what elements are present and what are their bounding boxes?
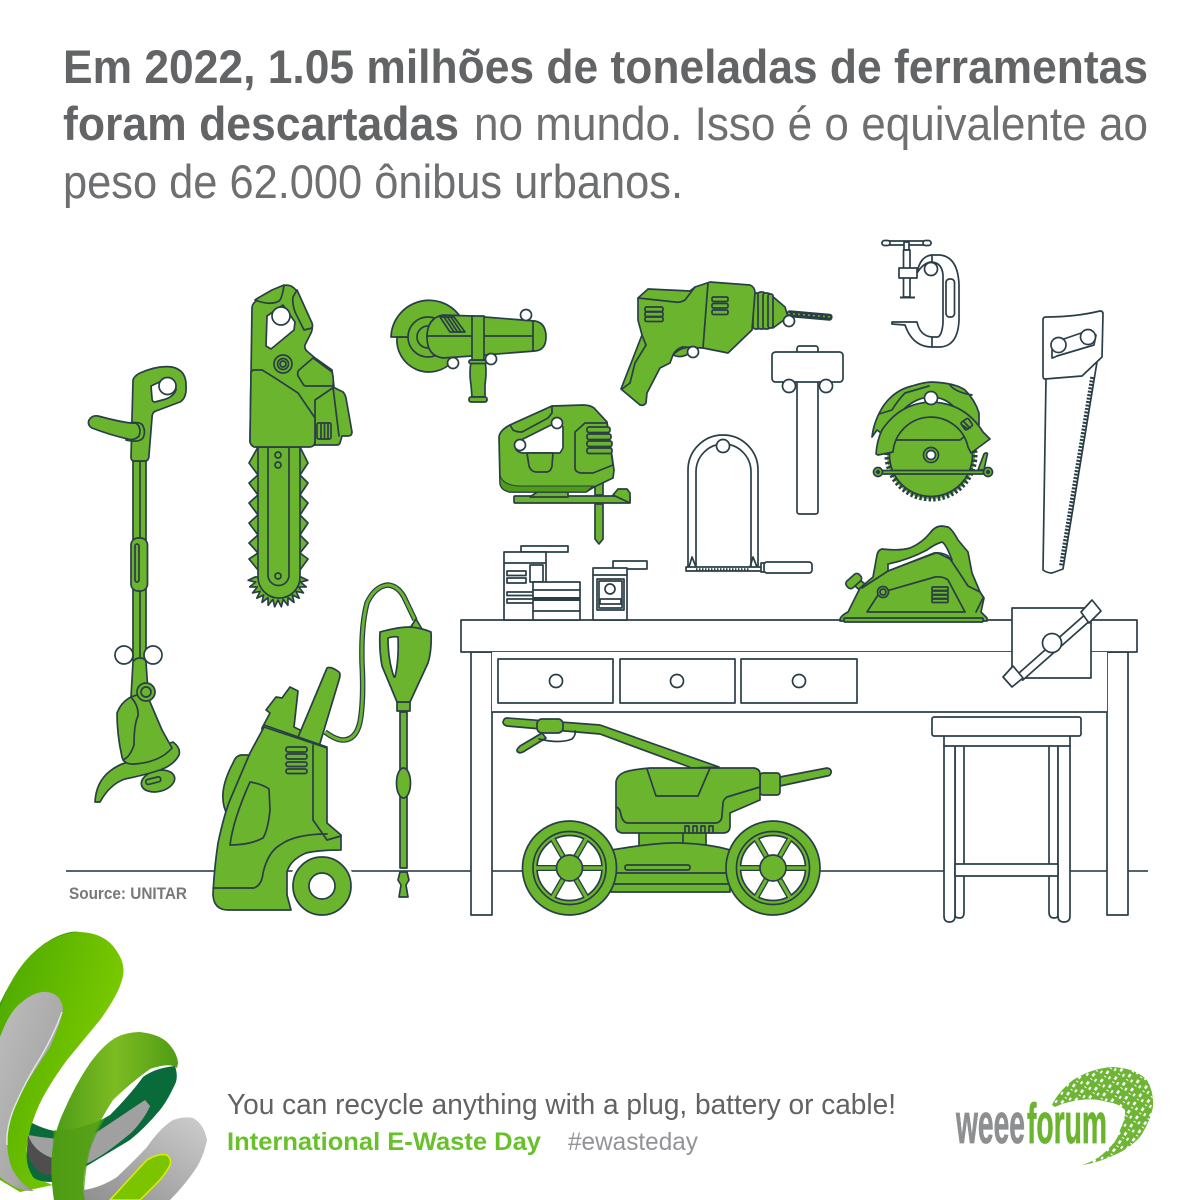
battery	[312, 387, 352, 445]
logo mark: green swirl	[0, 932, 207, 1200]
title: Em 2022, 1.05 milhões de toneladas de ferramentas	[63, 40, 1148, 93]
motor head	[117, 692, 172, 764]
weeeforum logo	[956, 1067, 1153, 1165]
white halo around wheel	[289, 853, 355, 919]
logo swirl	[1052, 1067, 1153, 1165]
device: stacked box	[533, 582, 580, 620]
motor housing	[616, 768, 760, 833]
electric drill	[621, 282, 833, 405]
lawn mower	[503, 718, 831, 915]
wheel	[293, 857, 351, 915]
shaft	[131, 461, 148, 661]
workbench	[461, 600, 1137, 915]
drawers	[498, 659, 857, 703]
hand saw	[1043, 311, 1103, 573]
left wheel	[522, 821, 616, 915]
hand planer	[840, 526, 987, 622]
title	[63, 40, 1148, 208]
vent	[317, 423, 331, 439]
vents	[645, 297, 728, 322]
vent	[440, 317, 465, 332]
angle grinder	[391, 300, 546, 402]
title: peso de 62.000 ônibus urbanos.	[63, 155, 683, 208]
hammer	[772, 346, 843, 514]
side handle	[470, 362, 486, 397]
chainsaw	[248, 285, 352, 607]
handle	[503, 718, 719, 768]
top fins	[262, 687, 306, 745]
blade teeth	[249, 447, 308, 570]
handle	[131, 367, 186, 461]
blade	[595, 498, 603, 544]
front knob	[844, 572, 870, 594]
jigsaw	[499, 405, 630, 544]
vent	[932, 587, 948, 602]
campaign name: International E-Waste Day	[227, 1128, 541, 1156]
grey loop	[0, 992, 63, 1191]
light grey lobe	[83, 1117, 207, 1200]
vents	[286, 747, 307, 774]
title: no mundo. Isso é o equivalente ao	[474, 97, 1148, 150]
bit	[786, 310, 833, 321]
spool	[139, 767, 177, 795]
toothed blade	[887, 411, 975, 499]
title: foram descartadas	[63, 97, 459, 150]
guard	[95, 742, 179, 802]
hashtag: #ewasteday	[568, 1128, 698, 1156]
deck	[611, 843, 730, 892]
weeeforum logo: forum	[1027, 1092, 1107, 1156]
device: tall unit	[504, 546, 568, 620]
floor line	[66, 870, 1148, 872]
spray gun	[380, 619, 431, 897]
saw body	[250, 285, 334, 445]
source note: Source: UNITAR	[69, 885, 187, 903]
weeeforum logo: weee	[956, 1092, 1025, 1156]
right wheel	[726, 821, 820, 915]
hose	[325, 585, 415, 740]
pressure washer	[213, 585, 431, 919]
bench vice	[1003, 600, 1101, 687]
bright loop	[51, 1032, 178, 1200]
rear bar	[780, 768, 831, 786]
lime tip	[110, 1155, 171, 1200]
circular saw	[872, 382, 992, 499]
hacksaw	[686, 435, 812, 573]
base	[514, 496, 630, 503]
rear bump	[223, 755, 250, 816]
device: small unit	[593, 561, 647, 620]
tabletop devices	[504, 546, 647, 620]
recycle message: You can recycle anything with a plug, battery or cable!	[227, 1089, 896, 1121]
c-clamp	[882, 240, 959, 347]
stool	[932, 717, 1081, 922]
chuck	[753, 292, 773, 329]
body	[213, 727, 341, 910]
ribs	[587, 427, 612, 454]
string trimmer	[88, 367, 186, 802]
dark band	[27, 1066, 177, 1182]
